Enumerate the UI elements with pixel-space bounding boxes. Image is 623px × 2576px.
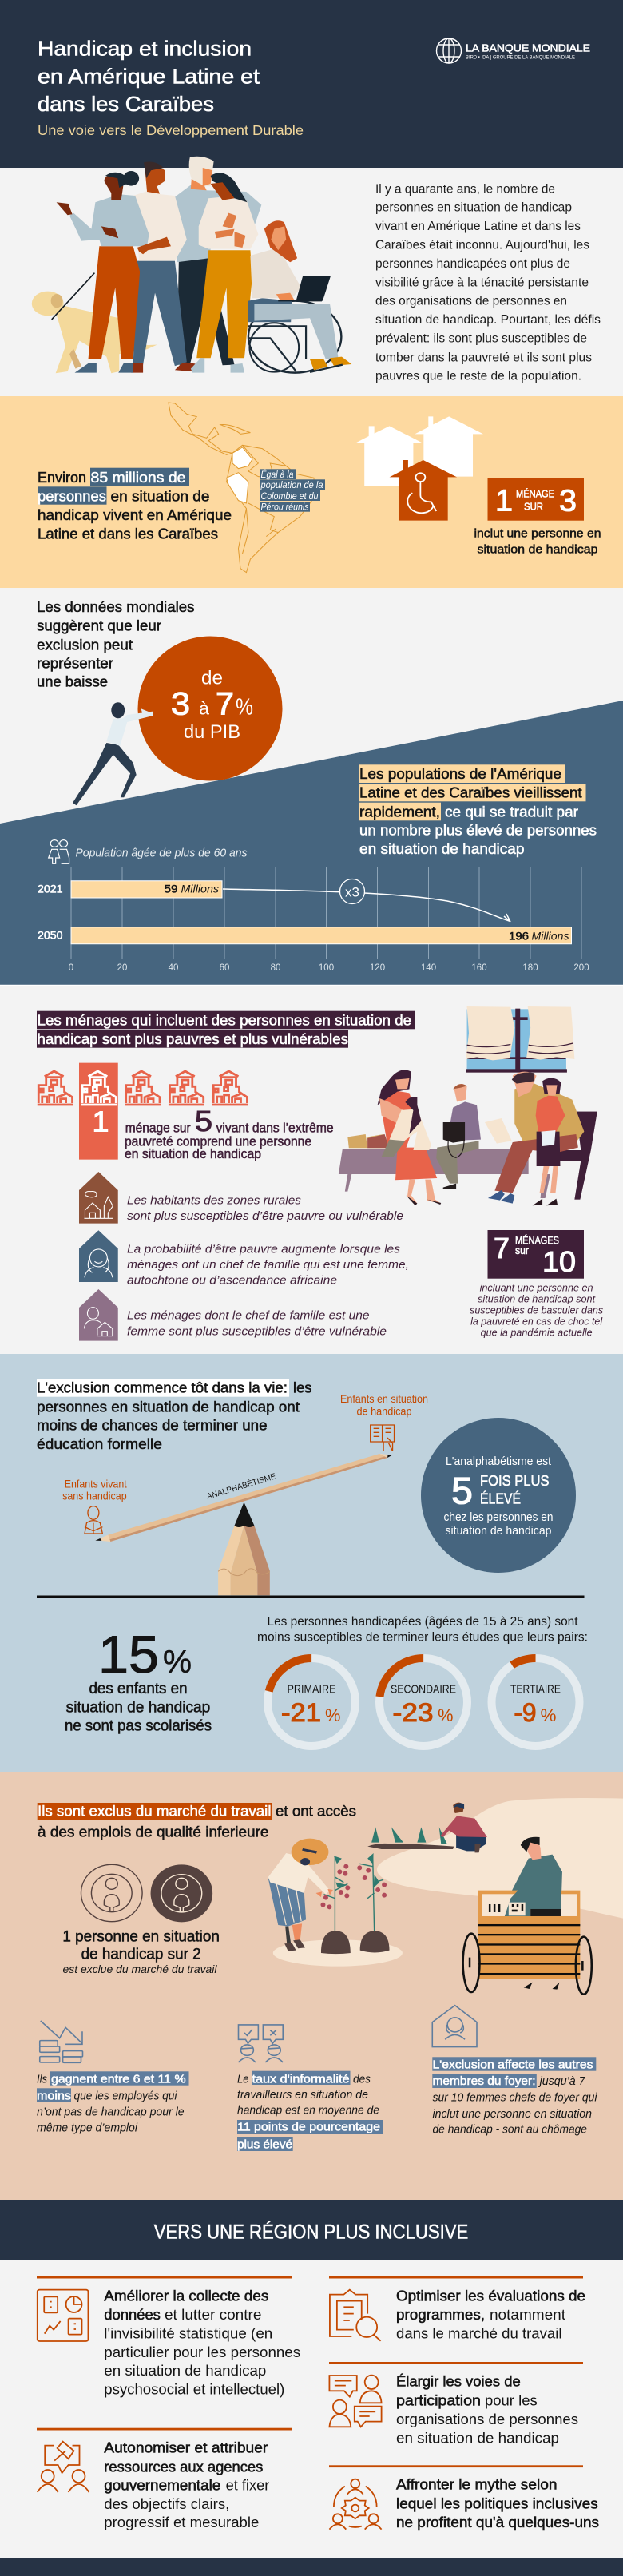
stat: 1 household in 3: 1 <box>495 484 513 518</box>
recommendation: empower agencies: gouvernementale <box>104 2478 220 2494</box>
logo: La Banque Mondiale <box>436 38 590 63</box>
recommendation: data collection: et lutter contre <box>165 2307 261 2323</box>
footer band <box>0 2558 623 2576</box>
recommendation: empower agencies <box>38 2440 269 2530</box>
text: informality: Le <box>237 2073 249 2086</box>
man with white hair <box>175 157 261 372</box>
intro paragraph <box>375 183 601 383</box>
icon: dashboard <box>38 2290 88 2341</box>
recommendation: programme evaluations: programmes, <box>396 2307 485 2323</box>
woman in yellow trousers <box>191 173 258 373</box>
donut: tertiary: % <box>540 1705 556 1725</box>
stat: 1 in 2 <box>62 1928 220 1975</box>
woman in blue sweater and red trousers <box>57 171 171 373</box>
icon: woman head of family <box>79 1230 118 1282</box>
panel: education <box>0 1354 623 1772</box>
icon: people around gear <box>329 2479 382 2530</box>
bar: 2050: 196 <box>509 930 529 943</box>
stat: 7 households in 10: MÉNAGES <box>515 1235 559 1246</box>
intro paragraph: personnes en situation de handicap <box>375 201 572 214</box>
icon: gavel and people <box>38 2442 89 2492</box>
girl <box>533 1078 565 1205</box>
text: informality: handicap est en moyenne de <box>237 2105 379 2118</box>
icon: falling income <box>40 2021 82 2062</box>
seesaw: pencil balance <box>85 1425 395 1595</box>
panel: recommendations header: VERS UNE RÉGION PLUS INCLUSIVE <box>154 2221 468 2244</box>
stat: 1 in 5: en situation de handicap <box>125 1147 261 1161</box>
callout: 3 to 7% of GDP: % <box>236 694 253 720</box>
icon: older couple <box>49 840 69 863</box>
stat: 15%: 15 <box>98 1625 159 1684</box>
title <box>38 37 260 116</box>
text: vulnerable <box>127 1309 387 1338</box>
stat: 1 household in 3: SUR <box>524 500 543 513</box>
axis labels <box>69 963 589 973</box>
donut: tertiary <box>475 1641 596 1763</box>
text: informality: 11 points de pourcentage <box>237 2122 380 2134</box>
recommendation: data collection: données <box>104 2307 161 2323</box>
heading: les <box>293 1379 312 1395</box>
mother <box>378 1070 441 1205</box>
text: informality: taux d'informalité <box>252 2073 350 2086</box>
intro paragraph: vivant en Amérique Latine et dans les <box>375 220 581 233</box>
heading: handicap sont plus pauvres et plus vulnérables <box>37 1030 348 1047</box>
recommendation: participation: en situation de handicap <box>396 2430 559 2446</box>
icon: rural house <box>79 1172 118 1224</box>
stat: 1 in 5: 5 <box>195 1105 212 1137</box>
stat: 1 household in 3: inclut une personne en <box>474 527 601 541</box>
text: pandemic shock: que la pandémie actuelle <box>481 1327 593 1339</box>
text: rural <box>127 1193 403 1223</box>
title: en Amérique Latine et <box>38 64 260 88</box>
dog <box>32 273 157 373</box>
callout: illiteracy 5 times higher: situation de handicap <box>446 1524 551 1538</box>
heading: L'exclusion commence tôt dans la vie: <box>37 1379 288 1395</box>
pencil fulcrum <box>218 1526 244 1595</box>
seesaw labels: sans handicap <box>62 1490 127 1502</box>
stat: 1 in 5: vivant dans l’extrême <box>216 1121 334 1136</box>
recommendation: participation: organisations de personnes <box>396 2411 578 2427</box>
headline <box>38 468 232 542</box>
recommendation: confront the myth: Affronter le mythe selon <box>396 2477 558 2493</box>
text: vulnerable: femme sont plus susceptibles d’être vulnérable <box>127 1324 387 1338</box>
logo: La Banque Mondiale: LA BANQUE MONDIALE <box>466 42 590 54</box>
intro paragraph: visibilité grâce à la ténacité persistante <box>375 276 589 290</box>
recommendation: empower agencies: Autonomiser et attribuer <box>104 2440 268 2456</box>
text: completion <box>257 1615 588 1644</box>
stat: 1 in 2: 1 personne en situation <box>62 1928 220 1946</box>
farmer with hat <box>268 1839 333 1951</box>
stat: 7 households in 10: 7 <box>494 1232 510 1264</box>
headline: handicap vivent en Amérique <box>38 506 232 523</box>
recommendation: data collection: psychosocial et intellectuel) <box>104 2381 284 2397</box>
stat: 15%: situation de handicap <box>66 1699 210 1716</box>
text: informality: des <box>353 2073 371 2086</box>
stat: 1 in 5 <box>93 1105 334 1161</box>
intro paragraph: tomber dans la pauvreté et ils sont plus <box>375 351 592 364</box>
callout: 3 to 7% of GDP: 3 <box>171 686 190 721</box>
map note: Pérou réunis <box>260 502 309 512</box>
seesaw labels <box>62 1393 428 1502</box>
icon: houses <box>355 416 483 521</box>
headline: Environ <box>38 469 86 486</box>
recommendation: empower agencies: et fixer <box>226 2478 269 2494</box>
recommendation: programme evaluations: Optimiser les évaluations de <box>396 2288 585 2304</box>
icon: braille book <box>371 1425 395 1451</box>
heading: GDP loss: une baisse <box>37 673 108 689</box>
recommendation: programme evaluations <box>330 2288 585 2341</box>
heading: et ont accès <box>276 1802 356 1819</box>
recommendation: data collection: Améliorer la collecte des <box>104 2288 268 2304</box>
text: female heads of household: ménages ont un chef de famille qui est une femme, <box>127 1258 409 1272</box>
text: vulnerable: Les ménages dont le chef de famille est une <box>127 1309 369 1323</box>
text: ageing populations: rapidement, <box>359 803 440 820</box>
callout: illiteracy 5 times higher <box>421 1418 576 1573</box>
bench <box>339 1112 597 1200</box>
text: informality: travailleurs en situation de <box>237 2089 368 2102</box>
gardener <box>367 1803 487 1852</box>
illustration: family on a bench <box>339 1006 597 1205</box>
text: other household members: sur 10 femmes chefs de foyer qui <box>433 2092 597 2105</box>
text: lower earnings: que les employés qui <box>73 2090 177 2102</box>
callout: 3 to 7% of GDP: 7 <box>216 686 234 721</box>
recommendation: confront the myth: ne profitent qu'à quelques-uns <box>396 2514 599 2530</box>
callout: 3 to 7% of GDP <box>137 636 283 781</box>
donut: secondary: -23 <box>393 1698 433 1727</box>
text: other household members: inclut une personne en situation <box>433 2108 592 2121</box>
recommendation: programme evaluations: notamment <box>490 2307 565 2323</box>
text: other household members: L'exclusion affecte les autres <box>433 2058 593 2071</box>
logo: La Banque Mondiale: BIRD • IDA | GROUPE DE LA BANQUE MONDIALE <box>466 54 576 61</box>
title: Handicap et inclusion <box>38 37 252 61</box>
heading: GDP loss: représenter <box>37 655 113 672</box>
heading: Ils sont exclus du marché du travail <box>38 1802 272 1819</box>
stat: 1 household in 3: MÉNAGE <box>516 487 554 500</box>
axis labels: 40 <box>169 963 178 973</box>
text: female heads of household <box>127 1242 409 1287</box>
tomato plants <box>320 1853 390 1954</box>
callout: illiteracy 5 times higher: 5 <box>451 1469 473 1511</box>
bar: 2021 <box>38 881 222 898</box>
seated boy <box>436 1084 481 1189</box>
panel: recommendations header <box>0 2200 623 2260</box>
icons: five households <box>38 1063 248 1160</box>
axis labels: 60 <box>220 963 229 973</box>
stat: 15% <box>65 1625 212 1735</box>
icon: woman in house <box>432 2006 477 2047</box>
panel: header <box>0 0 623 168</box>
text: ageing populations: Latine et des Caraïbes vieillissent <box>359 784 582 800</box>
pencil beam <box>108 1454 387 1542</box>
panel: poverty <box>0 985 623 1354</box>
axis labels: 100 <box>319 963 334 973</box>
text: other household members: de handicap - sont au chômage <box>433 2124 587 2137</box>
bar: 2050: Millions <box>532 930 569 943</box>
bar: 2021: 59 <box>165 882 178 895</box>
donut: secondary <box>375 1653 472 1751</box>
recommendation: participation <box>329 2374 578 2446</box>
stat: 1 in 5: pauvreté comprend une personne <box>125 1134 312 1149</box>
recommendation: participation: pour les <box>485 2392 538 2408</box>
stat: 7 households in 10: 10 <box>542 1245 576 1278</box>
callout: 3 to 7% of GDP: du PIB <box>184 721 240 743</box>
panel: employment <box>0 1772 623 2200</box>
arrow: growth x3: x3 <box>345 885 359 899</box>
text: lower earnings: Ils <box>37 2073 47 2086</box>
donut: primary <box>258 1649 365 1756</box>
father <box>485 1072 584 1204</box>
stat: 1 in 5: ménage sur <box>125 1121 191 1136</box>
headline: en situation de <box>110 488 209 505</box>
text: pandemic shock: la pauvreté en cas de choc tel <box>470 1315 603 1327</box>
recommendation: confront the myth <box>329 2477 599 2530</box>
recommendation: participation: Élargir les voies de <box>396 2374 521 2390</box>
heading: Les ménages qui incluent des personnes en situation de <box>37 1011 411 1028</box>
text: ageing populations: en situation de handicap <box>359 840 524 857</box>
callout: illiteracy 5 times higher: L'analphabétisme est <box>446 1455 552 1468</box>
icon: two persons, one excluded <box>81 1864 212 1922</box>
recommendation: data collection: particulier pour les personnes <box>104 2344 300 2360</box>
axis labels: 180 <box>522 963 538 973</box>
recommendation: data collection: en situation de handicap <box>104 2363 266 2379</box>
stat: 1 household in 3 <box>474 478 601 556</box>
heading: GDP loss: Les données mondiales <box>37 598 195 615</box>
stat: 15%: % <box>163 1645 192 1680</box>
heading: GDP loss <box>37 598 195 689</box>
recommendation: empower agencies: progressif et mesurable <box>104 2514 259 2530</box>
bar chart: population over 60: Population âgée de plus de 60 ans <box>75 846 248 859</box>
text: lower earnings <box>37 2071 188 2135</box>
heading <box>37 1011 415 1048</box>
intro paragraph: prévalent: ils sont plus susceptibles de <box>375 331 587 345</box>
text: pandemic shock: susceptibles de basculer dans <box>470 1304 604 1316</box>
donut: tertiary: -9 <box>514 1698 537 1727</box>
recommendation: empower agencies: des objectifs clairs, <box>104 2496 229 2512</box>
stat: 1 household in 3: situation de handicap <box>478 542 597 556</box>
man in cream top <box>131 161 187 373</box>
text: other household members: jusqu’à 7 <box>538 2075 586 2088</box>
donut: primary: PRIMAIRE <box>288 1682 335 1696</box>
icon: child without disability <box>85 1506 102 1534</box>
axis labels: 120 <box>370 963 385 973</box>
heading: éducation formelle <box>37 1435 162 1452</box>
text: lower earnings: moins <box>37 2090 71 2102</box>
seesaw labels: de handicap <box>356 1406 412 1418</box>
text: lower earnings: gagnent entre 6 et 11 % <box>51 2073 186 2086</box>
heading: GDP loss: suggèrent que leur <box>37 617 161 633</box>
stat: 15%: des enfants en <box>89 1681 187 1697</box>
icon: woman and house <box>79 1289 118 1341</box>
text: pandemic shock <box>470 1282 604 1339</box>
icon: informal work <box>238 2025 283 2062</box>
headline: Latine et dans les Caraïbes <box>38 525 218 542</box>
donut: tertiary: TERTIAIRE <box>510 1682 561 1696</box>
text: female heads of household: autochtone ou d’ascendance africaine <box>127 1273 337 1287</box>
text: completion: Les personnes handicapées (âgées de 15 à 25 ans) sont <box>267 1615 578 1629</box>
text: ageing populations: ce qui se traduit par <box>445 803 578 820</box>
illustration: farmers and braille vendor <box>268 1803 592 1995</box>
stat: 15%: ne sont pas scolarisés <box>65 1718 212 1735</box>
wheelchair user <box>248 220 351 373</box>
panel: recommendations <box>0 2260 623 2558</box>
text: pandemic shock: situation de handicap sont <box>478 1293 596 1305</box>
map note: population de la <box>260 481 323 490</box>
donut: primary: % <box>325 1705 340 1725</box>
intro paragraph: personnes handicapées ont plus de <box>375 257 570 271</box>
recommendation: data collection <box>38 2288 300 2397</box>
text: completion: moins susceptibles de terminer leurs études que leurs pairs: <box>257 1630 588 1644</box>
axis labels: 80 <box>271 963 280 973</box>
text: lower earnings: n’ont pas de handicap pour le <box>37 2106 185 2119</box>
axis labels: 140 <box>421 963 436 973</box>
headline: personnes <box>38 488 106 505</box>
intro paragraph: Il y a quarante ans, le nombre de <box>375 183 555 196</box>
seesaw labels: Enfants vivant <box>65 1478 127 1490</box>
arrow: growth x3 <box>223 879 510 922</box>
map note: Égal à la <box>260 470 294 480</box>
recommendation: confront the myth: lequel les politiques inclusives <box>396 2496 598 2512</box>
text: lower earnings: même type d’emploi <box>37 2122 138 2135</box>
seesaw labels: Enfants en situation <box>340 1393 428 1405</box>
illustration: group of people with guide dog and wheelchair user <box>32 157 351 373</box>
callout: illiteracy 5 times higher: FOIS PLUS <box>480 1473 550 1489</box>
callout: 3 to 7% of GDP: à <box>199 698 210 718</box>
ground line <box>37 1596 585 1598</box>
headline: 85 millions de <box>91 469 185 486</box>
text: other household members <box>432 2057 597 2137</box>
stat: 7 households in 10: sur <box>515 1244 529 1256</box>
text: ageing populations: Les populations de l'Amérique <box>359 765 561 782</box>
heading: GDP loss: exclusion peut <box>37 636 133 653</box>
text: informality: plus élevé <box>237 2138 292 2151</box>
map of Latin America <box>169 403 314 573</box>
intro paragraph: situation de handicap. Pourtant, les défis <box>375 313 601 327</box>
bar: 2050: 2050 <box>38 928 63 941</box>
stat: 1 in 5: 1 <box>93 1105 109 1138</box>
stat: 1 household in 3: 3 <box>559 484 577 518</box>
window <box>466 1006 574 1073</box>
heading: à des emplois de qualité inferieure <box>38 1823 268 1840</box>
callout: 3 to 7% of GDP: de <box>201 668 223 689</box>
icon: people talking <box>329 2376 382 2427</box>
donut: secondary: SECONDAIRE <box>391 1682 456 1696</box>
recommendation: programme evaluations: dans le marché du travail <box>396 2325 562 2341</box>
heading <box>37 1379 312 1452</box>
intro paragraph: des organisations de personnes en <box>375 294 567 308</box>
axis labels: 0 <box>69 963 73 973</box>
background shape <box>273 1798 623 1967</box>
text: rural: Les habitants des zones rurales <box>127 1193 302 1207</box>
intro paragraph: pauvres que le reste de la population. <box>375 370 581 383</box>
heading: personnes en situation de handicap ont <box>37 1398 300 1415</box>
icon: clipboard and magnifier <box>330 2290 381 2341</box>
axis labels: 20 <box>117 963 127 973</box>
stat: 7 households in 10 <box>487 1230 584 1279</box>
subtitle: Une voie vers le Développement Durable <box>38 122 304 138</box>
text: female heads of household: La probabilité d’être pauvre augmente lorsque les <box>127 1242 401 1256</box>
callout: illiteracy 5 times higher: chez les personnes en <box>444 1510 553 1524</box>
panel: GDP and ageing, blue diagonal <box>0 701 623 985</box>
map note: Colombie et du <box>260 492 319 502</box>
text: other household members: membres du foyer: <box>433 2075 535 2088</box>
seesaw labels: ANALPHABÉTISME <box>205 1471 277 1502</box>
stat: 1 in 2: de handicap sur 2 <box>81 1945 201 1963</box>
text: ageing populations <box>359 764 597 857</box>
panel: 85 millions <box>0 396 623 588</box>
axis labels: 160 <box>471 963 487 973</box>
recommendation: data collection: l'invisibilité statistique (en <box>104 2325 272 2341</box>
heading <box>38 1802 356 1840</box>
bar: 2021: Millions <box>181 882 219 895</box>
text: ageing populations: un nombre plus élevé de personnes <box>359 822 597 839</box>
recommendation: participation: participation <box>396 2392 481 2408</box>
donut: secondary: % <box>438 1705 454 1725</box>
heading: moins de chances de terminer une <box>37 1417 268 1434</box>
text: rural: sont plus susceptibles d’être pauvre ou vulnérable <box>127 1209 403 1223</box>
bar: 2050 <box>38 927 572 944</box>
recommendation: empower agencies: ressources aux agences <box>104 2459 263 2475</box>
map note <box>260 469 325 512</box>
title: dans les Caraïbes <box>38 92 214 116</box>
vendor at cart <box>463 1837 592 1995</box>
intro paragraph: Caraïbes était inconnu. Aujourd'hui, les <box>375 238 589 252</box>
illustration: person pushing the circle <box>73 702 153 805</box>
callout: illiteracy 5 times higher: ÉLEVÉ <box>480 1491 521 1507</box>
bar: 2021: 2021 <box>38 882 63 895</box>
axis labels: 200 <box>573 963 589 973</box>
stat: 1 in 2: est exclue du marché du travail <box>62 1963 217 1975</box>
bar chart: population over 60 <box>38 840 589 973</box>
text: pandemic shock: incluant une personne en <box>480 1282 593 1294</box>
text: informality <box>237 2071 383 2151</box>
donut: primary: -21 <box>281 1698 321 1727</box>
